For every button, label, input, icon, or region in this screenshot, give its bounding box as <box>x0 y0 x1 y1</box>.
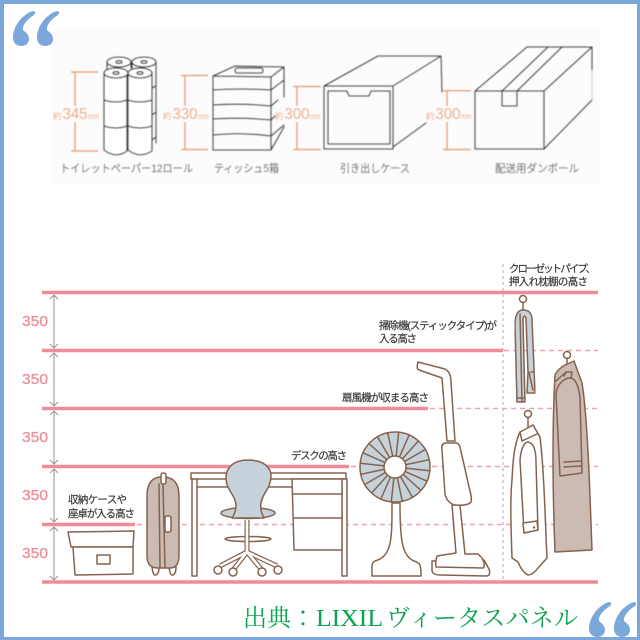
values: 350 labels: 350 <box>22 429 48 446</box>
values: 350 labels: 350 <box>22 313 48 330</box>
source credit: ヴィータスパネル <box>386 606 578 632</box>
panel: top reference objects <box>50 28 601 183</box>
vertical dotted divider <box>502 264 504 582</box>
line 4 <box>42 465 598 468</box>
label: closet pipe height: 押入れ枕棚の高さ <box>509 275 588 288</box>
dimension: 330mm: 約 <box>163 111 172 121</box>
caption: tissue: ティッシュ5箱 <box>214 161 279 175</box>
icon: closing quotation mark <box>589 602 636 637</box>
line 5 <box>42 523 598 526</box>
label: stick vacuum height: 入る高さ <box>379 332 417 345</box>
dimension: 300mm right: 約 <box>426 111 435 121</box>
line 1 <box>42 291 598 294</box>
dimension: 300mm left: 約 <box>275 111 284 121</box>
icon: opening quotation mark <box>13 11 59 46</box>
dimension: 345mm: mm <box>88 111 99 121</box>
dimension: 330mm: 330 <box>172 106 198 123</box>
dimension: 300mm right: mm <box>460 111 472 121</box>
label: storage case height: 収納ケースや <box>68 493 127 506</box>
dimension: 345mm: 345 <box>62 106 88 123</box>
values: 350 labels: 350 <box>22 545 48 562</box>
label: closet pipe height: クローゼットパイプ、 <box>509 263 596 275</box>
caption: toilet paper: トイレットペーパー12ロール <box>60 162 193 175</box>
dimension: 330mm: mm <box>198 111 209 121</box>
dimension: 345mm <box>53 72 99 151</box>
illustration: stick vacuum <box>417 362 490 576</box>
values: 350 labels <box>22 313 48 562</box>
line 2 <box>42 349 598 352</box>
label: stick vacuum height <box>379 319 498 345</box>
label: desk height: デスクの高さ <box>291 449 347 462</box>
label: stick vacuum height: 掃除機(スティックタイプ)が <box>379 319 498 332</box>
dimension: 300mm left: 300 <box>284 106 310 123</box>
illustration: scarf on hanger <box>515 296 535 402</box>
caption: drawer case: 引き出しケース <box>340 161 410 175</box>
values: 350 labels: 350 <box>22 371 48 388</box>
dimension: 300mm right <box>426 91 472 150</box>
illustration: toilet paper rolls <box>104 57 156 155</box>
illustration: storage box <box>68 531 134 575</box>
label: storage case height: 座卓が入る高さ <box>68 507 135 520</box>
illustration: drawer case <box>324 56 442 149</box>
label: closet pipe height <box>509 263 596 288</box>
illustration: suitcase <box>147 473 179 575</box>
dimension: 330mm <box>163 76 209 150</box>
label: storage case height <box>68 493 135 520</box>
illustration: coat on hanger <box>553 352 592 552</box>
dimension: 345mm: 約 <box>53 111 62 121</box>
illustration: chair <box>214 460 282 576</box>
source credit: LIXIL <box>316 606 383 632</box>
label: fan height: 扇風機が収まる高さ <box>342 391 429 404</box>
dimension: 300mm left <box>275 86 321 150</box>
line 3 <box>42 407 598 410</box>
illustration: tissue boxes <box>213 66 284 150</box>
dimension arrows <box>50 295 58 580</box>
baseline <box>42 580 598 584</box>
values: 350 labels: 350 <box>22 487 48 504</box>
dimension: 300mm right: 300 <box>436 106 461 123</box>
illustration: desk <box>191 473 347 576</box>
illustration: electric fan <box>360 432 430 576</box>
illustration: shipping carton <box>475 47 592 149</box>
caption: carton: 配送用ダンボール <box>495 161 579 175</box>
chart: height guide lines at 350 intervals <box>22 264 598 582</box>
source credit: 出典： <box>243 606 315 632</box>
dimension: 300mm left: mm <box>310 111 320 121</box>
illustration: shirt on hanger <box>511 410 547 575</box>
